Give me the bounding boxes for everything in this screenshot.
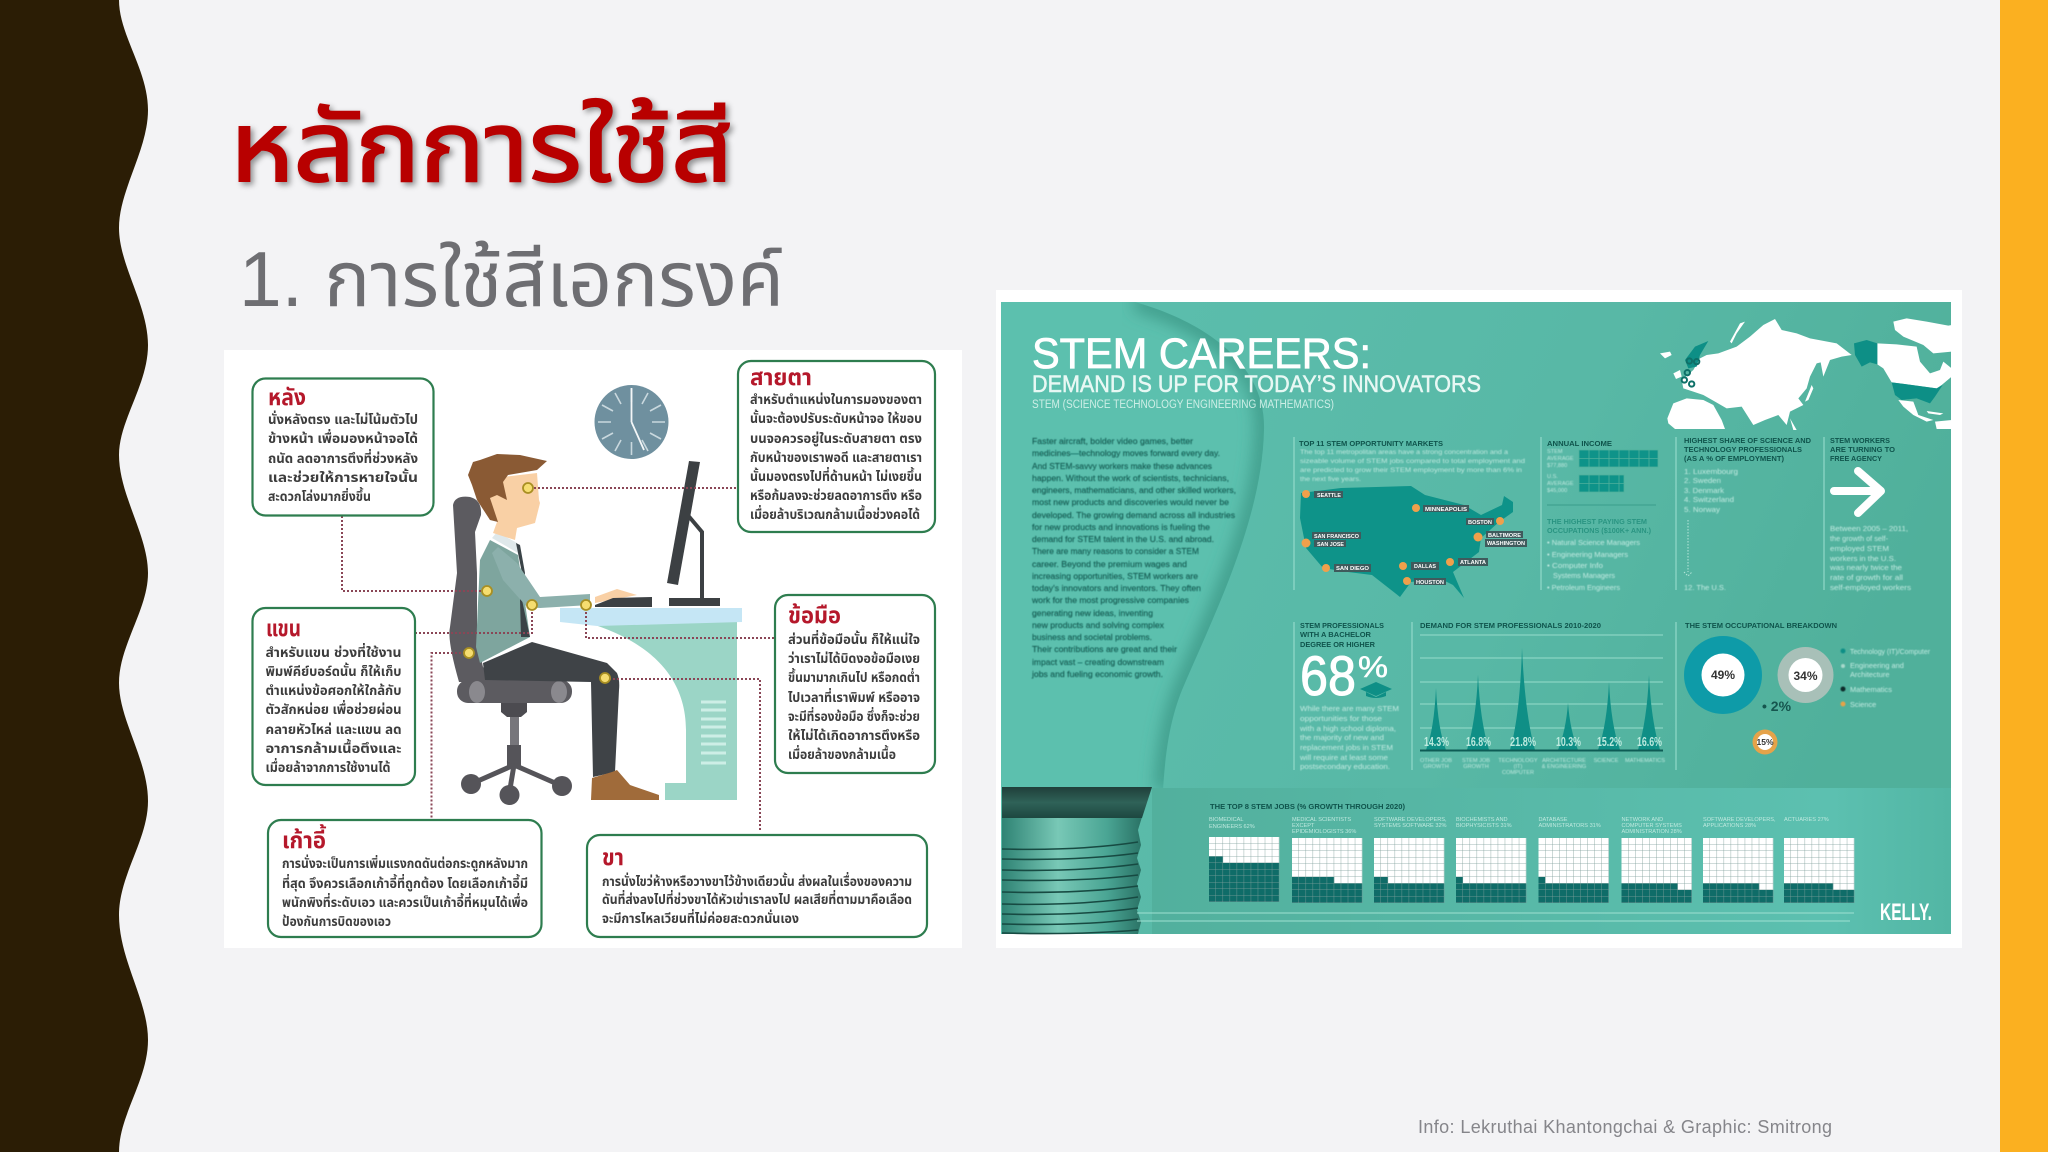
text block: growth of self-employed: was nearly twice the xyxy=(1829,563,1902,572)
income labels: $77,880 xyxy=(1547,463,1567,469)
chart categories: OTHER JOB xyxy=(1420,758,1452,764)
callout: ข้อมือ: ให้ไม่ได้เกิดอาการตึงหรือ xyxy=(788,727,920,743)
callout: เก้าอี้: พนักพิงที่ระดับเอว และควรเป็นเก้าอี้ที่หมุนได้เพื่อ xyxy=(282,893,528,911)
waffle: software developers, applications: SOFTWARE DEVELOPERS, xyxy=(1703,817,1776,823)
waffle: actuaries xyxy=(1784,817,1854,903)
text block: growth of self-employed: Between 2005 – 2011, xyxy=(1830,524,1908,533)
chart values: 14.3% xyxy=(1424,735,1449,749)
waffle: database administrators xyxy=(1538,817,1609,903)
chart values: 10.3% xyxy=(1556,735,1581,749)
text block: introduction paragraph: And STEM-savvy workers make these advances xyxy=(1032,461,1212,471)
callout: แขน: ตัวสักหน่อย เพื่อช่วยผ่อน xyxy=(266,700,402,717)
callout: ขา: จะมีการไหลเวียนที่ไม่ค่อยสะดวกนั่นเอง xyxy=(602,909,799,926)
callout: ข้อมือ: ข้อมือ xyxy=(788,602,841,628)
section dividers xyxy=(1294,437,1824,770)
waffle: medical scientists: EXCEPT xyxy=(1292,823,1315,829)
occupation list: • Engineering Managers xyxy=(1547,550,1628,559)
waffle: network administrators xyxy=(1622,817,1692,903)
callout: ข้อมือ: ว่าเราไม่ได้บิดงอข้อมือเงย xyxy=(788,650,920,666)
income labels xyxy=(1547,449,1574,494)
US map xyxy=(1300,486,1513,598)
panel: bachelor degree stat: 68 xyxy=(1300,644,1356,707)
heading: STEM careers: STEM CAREERS: xyxy=(1032,330,1371,378)
callout: หลัง: ข้างหน้า เพื่อมองหน้าจอได้ xyxy=(268,429,418,446)
ranked list: 2. Sweden xyxy=(1684,476,1721,485)
text block: degree note: will require at least some xyxy=(1299,753,1388,762)
ranked list: 1. Luxembourg xyxy=(1684,467,1738,476)
callout: หลัง: สะดวกโล่งมากยิ่งขึ้น xyxy=(268,487,371,504)
logo: KELLY: KELLY. xyxy=(1880,899,1932,926)
text block: introduction paragraph: most new products and discoveries would never be xyxy=(1032,497,1229,507)
panel: annual income xyxy=(1547,439,1658,592)
waffle: software developers, systems: SYSTEMS SOFTWARE 32% xyxy=(1374,823,1447,829)
chart categories xyxy=(1420,758,1665,776)
donut: 15%: 15% xyxy=(1756,737,1774,747)
panel: bachelor degree stat: DEGREE OR HIGHER xyxy=(1300,640,1375,649)
city markers: SAN FRANCISCO xyxy=(1314,534,1360,540)
panel: bachelor degree stat: WITH A BACHELOR xyxy=(1300,630,1372,639)
panel: office ergonomics infographic xyxy=(224,350,962,948)
text block: introduction paragraph: generating new ideas, inventing xyxy=(1032,608,1153,618)
waffle: biomedical engineers xyxy=(1209,817,1279,902)
ranked list xyxy=(1684,467,1738,592)
text block: degree note: postsecondary education. xyxy=(1300,762,1390,771)
panel: free agency: STEM WORKERS xyxy=(1830,436,1890,445)
text block: introduction paragraph: career. Beyond the premium wages and xyxy=(1032,559,1187,569)
text block: markets intro: The top 11 metropolitan areas have a strong concentration and a xyxy=(1300,449,1508,456)
chart values: 16.6% xyxy=(1637,735,1662,749)
chart values: 21.8% xyxy=(1510,735,1536,749)
occupation list xyxy=(1547,538,1640,592)
callout: ขา: ขา xyxy=(602,844,624,870)
legend: Mathematics xyxy=(1850,685,1892,694)
text block: introduction paragraph: happen. Without the work of scientists, technicians, xyxy=(1032,473,1229,483)
text block: introduction paragraph: engineers, mathematicians, and other skilled workers, xyxy=(1032,485,1236,495)
waffle: biochemists: BIOPHYSICISTS 31% xyxy=(1456,823,1512,829)
callout: หลัง xyxy=(252,378,434,516)
occupation list: • Petroleum Engineers xyxy=(1547,583,1620,592)
waffle: medical scientists: MEDICAL SCIENTISTS xyxy=(1292,817,1351,823)
panel: annual income: OCCUPATIONS ($100K+ ANN.) xyxy=(1547,526,1651,535)
panel: free agency: FREE AGENCY xyxy=(1830,454,1882,463)
chart categories: ARCHITECTURE xyxy=(1542,758,1586,764)
panel: annual income: ANNUAL INCOME xyxy=(1547,439,1612,448)
text block: markets intro: the next five years. xyxy=(1300,476,1361,483)
lower band xyxy=(1152,788,1951,934)
chart values: 16.8% xyxy=(1466,735,1491,749)
waffle: medical scientists xyxy=(1292,817,1362,903)
computer monitor xyxy=(667,461,720,606)
waffle: actuaries: ACTUARIES 27% xyxy=(1784,817,1829,823)
city markers: HOUSTON xyxy=(1416,580,1444,586)
panel: top 8 STEM jobs xyxy=(1137,802,1854,921)
text block: growth of self-employed: employed STEM xyxy=(1830,544,1889,553)
text block: degree note: replacement jobs in STEM xyxy=(1300,743,1393,752)
panel: highest share of professionals xyxy=(1684,436,1812,592)
text block: introduction paragraph: business and societal problems. xyxy=(1032,632,1152,642)
credit line: Info: Lekruthai Khantongchai & Graphic: Smitrong xyxy=(1418,1117,1832,1137)
text block: introduction paragraph: for new products and innovations is fueling the xyxy=(1032,522,1210,532)
text block: growth of self-employed: self-employed workers xyxy=(1830,583,1911,592)
occupation list: • Natural Science Managers xyxy=(1547,538,1640,547)
callout: ข้อมือ: ส่วนที่ข้อมือนั้น ก็ให้แน่ใจ xyxy=(788,630,920,647)
text block: degree note xyxy=(1299,704,1399,771)
city markers: ATLANTA xyxy=(1460,560,1486,566)
chart: demand for STEM professionals: DEMAND FOR STEM PROFESSIONALS 2010-2020 xyxy=(1420,621,1601,630)
text block: introduction paragraph: There are many reasons to consider a STEM xyxy=(1032,546,1199,556)
arrow: rank down xyxy=(1684,520,1692,576)
text block: growth of self-employed xyxy=(1829,524,1911,592)
callout: ขา xyxy=(587,835,927,937)
worker figure xyxy=(468,454,659,800)
marker dots xyxy=(464,483,610,683)
text block: introduction paragraph: Their contributions are great and their xyxy=(1032,644,1177,654)
panel: annual income: THE HIGHEST PAYING STEM xyxy=(1547,517,1647,526)
chart categories: TECHNOLOGY xyxy=(1498,758,1538,764)
city markers: MINNEAPOLIS xyxy=(1425,507,1467,513)
text block: introduction paragraph: medicines—technology moves forward every day. xyxy=(1032,448,1220,458)
callout: แขน: คลายหัวไหล่ และแขน ลด xyxy=(266,721,402,737)
callout: ข้อมือ: ไปเวลาที่เราพิมพ์ หรืออาจ xyxy=(788,688,920,705)
text block: introduction paragraph: demand for STEM talent in the U.S. and abroad. xyxy=(1032,534,1214,544)
callout: ข้อมือ: จะมีที่รองข้อมือ ซึ่งก็จะช่วย xyxy=(788,707,920,724)
callout: แขน: พิมพ์คีย์บอร์ดนั้น ก็ให้เก็บ xyxy=(266,662,402,679)
waffle: software developers, applications xyxy=(1703,817,1776,903)
chart: demand for STEM professionals xyxy=(1420,621,1665,776)
callout: เก้าอี้: ที่สุด จึงควรเลือกเก้าอี้ที่ถูกต้อง โดยเลือกเก้าอี้มี xyxy=(282,874,528,893)
text block: introduction paragraph: new products and solving complex xyxy=(1032,620,1165,630)
icon: graduation cap xyxy=(1360,682,1392,698)
callout: สายตา: สำหรับตำแหน่งในการมองของตา xyxy=(750,391,922,407)
panel: bachelor degree stat: % xyxy=(1358,651,1388,684)
city markers: SEATTLE xyxy=(1317,493,1341,499)
callout: เก้าอี้: เก้าอี้ xyxy=(282,824,327,853)
city markers: SAN JOSE xyxy=(1317,542,1344,548)
callout: สายตา: กับหน้าของเราพอดี และสายตาเรา xyxy=(750,450,922,465)
callout: แขน: แขน xyxy=(266,615,301,641)
text block: introduction paragraph: work for the most progressive companies xyxy=(1031,595,1189,605)
panel: top 11 STEM opportunity markets xyxy=(1299,439,1527,598)
light bulb shape xyxy=(1132,302,1264,788)
chart: occupational breakdown xyxy=(1684,621,1931,754)
chart categories: GROWTH xyxy=(1463,764,1489,770)
chart categories: COMPUTER xyxy=(1502,770,1534,776)
left dark wavy band xyxy=(0,0,148,1152)
waffle: software developers, applications: APPLICATIONS 28% xyxy=(1703,823,1756,829)
callout: ข้อมือ: ขึ้นมามากเกินไป หรือกดต่ำ xyxy=(788,668,920,685)
legend xyxy=(1840,647,1931,709)
chart categories: MATHEMATICS xyxy=(1625,758,1665,764)
callout: สายตา: บนจอควรอยู่ในระดับสายตา ตรง xyxy=(750,430,922,448)
text block: degree note: opportunities for those xyxy=(1300,714,1382,723)
callout: แขน: ตำแหน่งข้อศอกให้ใกล้กับ xyxy=(266,682,402,698)
panel: bachelor degree stat xyxy=(1299,621,1399,771)
text block: introduction paragraph: jobs and fueling economic growth. xyxy=(1031,669,1163,679)
donut: 34%: 34% xyxy=(1793,669,1818,683)
panel: bachelor degree stat: STEM PROFESSIONALS xyxy=(1300,621,1384,630)
panel: top 11 STEM opportunity markets: TOP 11 STEM OPPORTUNITY MARKETS xyxy=(1299,439,1443,448)
legend: Architecture xyxy=(1850,670,1889,679)
callout: หลัง: นั่งหลังตรง และไม่โน้มตัวไป xyxy=(268,410,418,427)
chart categories: SCIENCE xyxy=(1594,758,1619,764)
income labels: $45,000 xyxy=(1547,488,1567,494)
city markers xyxy=(1302,490,1527,586)
text block: markets intro xyxy=(1300,449,1525,483)
chart categories: (IT) xyxy=(1514,764,1522,770)
text block: introduction paragraph: increasing opportunities, STEM workers are xyxy=(1032,571,1198,581)
waffle: database administrators: DATABASE xyxy=(1538,817,1568,823)
waffle: database administrators: ADMINISTRATORS 31% xyxy=(1538,823,1601,829)
text block: introduction paragraph: impact vast – creating downstream xyxy=(1032,657,1164,667)
text block: degree note: While there are many STEM xyxy=(1300,704,1399,713)
callout: แขน xyxy=(252,608,415,785)
city markers: DALLAS xyxy=(1414,564,1436,570)
legend: Science xyxy=(1850,700,1876,709)
panel: top 8 STEM jobs: THE TOP 8 STEM JOBS (% GROWTH THROUGH 2020) xyxy=(1210,802,1405,811)
chart categories: GROWTH xyxy=(1423,764,1449,770)
bulb socket xyxy=(1002,787,1152,934)
ranked list: 12. The U.S. xyxy=(1684,583,1726,592)
income labels: STEM xyxy=(1547,449,1563,455)
heading: STEM careers: STEM (SCIENCE TECHNOLOGY ENGINEERING MATHEMATICS) xyxy=(1032,399,1334,411)
callout: หลัง: หลัง xyxy=(268,384,306,410)
callout: ข้อมือ xyxy=(775,595,935,773)
text block: degree note: with a high school diploma, xyxy=(1299,724,1396,733)
chart categories: & ENGINEERING xyxy=(1542,764,1586,770)
waffle: biomedical engineers: BIOMEDICAL xyxy=(1209,817,1244,823)
waffle: medical scientists: EPIDEMIOLOGISTS 36% xyxy=(1292,829,1356,835)
callout: ขา: การนั่งไขว่ห้างหรือวางขาไว้ข้างเดียวนั้น ส่งผลในเรื่องของความ xyxy=(602,872,912,889)
city markers: SAN DIEGO xyxy=(1336,566,1370,572)
waffle: network administrators: ADMINISTRATION 28% xyxy=(1622,829,1682,835)
chart values xyxy=(1424,735,1662,749)
right yellow bar xyxy=(2000,0,2048,1152)
panel: free agency: ARE TURNING TO xyxy=(1830,445,1895,454)
text block: introduction paragraph: Faster aircraft, bolder video games, better xyxy=(1032,436,1193,446)
donut: 49%: 49% xyxy=(1711,668,1735,682)
donut: 34% xyxy=(1778,647,1834,703)
panel: highest share of professionals: HIGHEST SHARE OF SCIENCE AND xyxy=(1684,436,1812,445)
callout: เก้าอี้ xyxy=(268,820,542,937)
callout: ขา: ดันที่ส่งลงไปที่ช่วงขาได้หัวเข่าเราลงไป ผลเสียที่ตามมาคือเลือด xyxy=(602,890,912,907)
city markers: BOSTON xyxy=(1468,520,1492,526)
text block: growth of self-employed: rate of growth for all xyxy=(1830,573,1903,582)
income bars xyxy=(1579,450,1658,492)
callout: หลัง: และช่วยให้การหายใจนั้น xyxy=(268,468,418,485)
text block: growth of self-employed: the growth of self- xyxy=(1830,534,1889,543)
text block: introduction paragraph xyxy=(1031,436,1236,679)
heading: STEM careers xyxy=(1032,330,1481,411)
occupation list: • Computer Info xyxy=(1547,561,1603,570)
legend: Engineering and xyxy=(1850,661,1904,670)
waffle: biochemists xyxy=(1456,817,1526,903)
income labels: AVERAGE xyxy=(1547,481,1574,487)
ranked list: 3. Denmark xyxy=(1684,486,1724,495)
text block: growth of self-employed: workers in the U.S. xyxy=(1829,554,1896,563)
callout: สายตา: นั้นมองตรงไปที่ด้านหน้า ไม่เงยขึ้น xyxy=(750,467,922,484)
callout: แขน: สำหรับแขน ช่วงที่ใช้งาน xyxy=(266,643,402,660)
text block: introduction paragraph: today's innovators and inventors. They often xyxy=(1032,583,1201,593)
income labels: AVERAGE xyxy=(1547,456,1574,462)
office chair xyxy=(449,497,572,805)
chart: occupational breakdown: THE STEM OCCUPATIONAL BREAKDOWN xyxy=(1685,621,1837,630)
dotted connectors xyxy=(342,488,775,832)
arrow: right xyxy=(1834,471,1881,513)
city markers: WASHINGTON xyxy=(1487,541,1525,547)
callout: สายตา xyxy=(738,361,935,532)
callout: สายตา: หรือก้มลงจะช่วยลดอาการตึง หรือ xyxy=(750,487,922,503)
donut: 15% xyxy=(1752,730,1778,754)
waffle: biochemists: BIOCHEMISTS AND xyxy=(1456,817,1508,823)
waffle: software developers, systems: SOFTWARE DEVELOPERS, xyxy=(1374,817,1447,823)
waffle: biomedical engineers: ENGINEERS 62% xyxy=(1209,824,1255,830)
illustration: seated worker at desk xyxy=(449,385,742,805)
callout: สายตา: สายตา xyxy=(750,364,812,390)
panel: highest share of professionals: TECHNOLOGY PROFESSIONALS xyxy=(1684,445,1802,454)
text block: degree note: the majority of new and xyxy=(1300,733,1384,742)
subtitle: 1. การใช้สีเอกรงค์ xyxy=(239,235,784,323)
text block: introduction paragraph: developed. The growing demand across all industries xyxy=(1032,510,1235,520)
occupation list: Systems Managers xyxy=(1553,571,1615,580)
world map xyxy=(1660,318,1952,430)
chart categories: STEM JOB xyxy=(1462,758,1490,764)
callout: แขน: เมื่อยล้าจากการใช้งานได้ xyxy=(266,758,390,775)
callout: สายตา: เมื่อยล้าบริเวณกล้ามเนื้อช่วงคอได้ xyxy=(750,505,920,522)
callout: เก้าอี้: การนั่งจะเป็นการเพิ่มแรงกดดันต่อกระดูกหลังมาก xyxy=(282,854,528,873)
desk xyxy=(560,608,742,800)
panel: STEM careers infographic xyxy=(996,290,1962,948)
ranked list: 4. Switzerland xyxy=(1684,495,1734,504)
text block: markets intro: sizeable volume of STEM jobs compared to total employment and xyxy=(1300,458,1525,465)
panel: free agency xyxy=(1829,436,1911,592)
callout: เก้าอี้: ป้องกันการบิดของเอว xyxy=(282,914,391,929)
callout: แขน: อาการกล้ามเนื้อตึงและ xyxy=(266,739,402,756)
text block: markets intro: are predicted to grow their STEM employment by more than 6% in xyxy=(1300,467,1522,474)
title: หลักการใช้สี xyxy=(230,92,733,202)
waffle: software developers, systems xyxy=(1374,817,1447,903)
heading: STEM careers: DEMAND IS UP FOR TODAY’S INNOVATORS xyxy=(1032,371,1481,398)
waffle: network administrators: COMPUTER SYSTEMS xyxy=(1622,823,1682,829)
legend: Technology (IT)/Computer xyxy=(1850,647,1931,656)
callout: หลัง: ถนัด ลดอาการตึงที่ช่วงหลัง xyxy=(268,449,418,466)
callout: สายตา: นั้นจะต้องปรับระดับหน้าจอ ให้ขอบ xyxy=(750,409,922,426)
chart values: 15.2% xyxy=(1597,735,1622,749)
panel: highest share of professionals: (AS A % OF EMPLOYMENT) xyxy=(1684,454,1784,463)
waffle: network administrators: NETWORK AND xyxy=(1622,817,1663,823)
income labels: U.S. xyxy=(1547,474,1558,480)
city markers: BALTIMORE xyxy=(1488,533,1521,539)
ranked list: 5. Norway xyxy=(1684,505,1720,514)
callout: ข้อมือ: เมื่อยล้าของกล้ามเนื้อ xyxy=(788,745,896,762)
stat: 2%: • 2% xyxy=(1762,698,1792,714)
spikes xyxy=(1426,648,1660,750)
icon: wall clock xyxy=(594,385,668,459)
donut: 49% xyxy=(1684,636,1762,714)
